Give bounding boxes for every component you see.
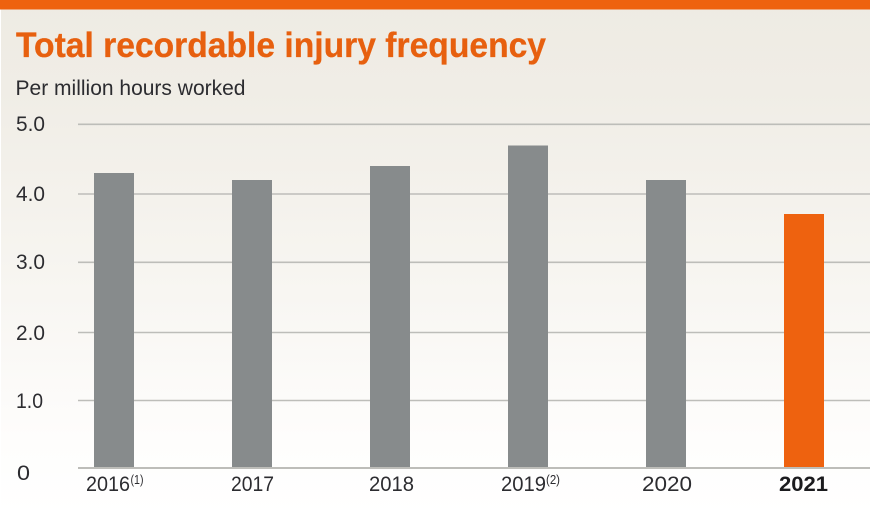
y axis labels: 0	[17, 462, 30, 485]
x axis labels: 2019	[501, 473, 546, 496]
y axis labels: 3.0	[16, 251, 45, 274]
x axis labels: 2021	[779, 473, 828, 496]
bar 2016: 4.3	[94, 173, 134, 468]
bar chart	[94, 146, 824, 468]
x axis labels	[86, 472, 828, 496]
x axis line	[78, 467, 870, 469]
bar 2018: 4.4	[370, 166, 410, 468]
y axis labels: 4.0	[16, 183, 45, 206]
y axis labels: 2.0	[16, 322, 45, 345]
x axis labels: (2)	[546, 472, 560, 487]
title: Total recordable injury frequency	[16, 25, 546, 65]
bar 2020: 4.2	[646, 180, 686, 468]
y axis labels: 5.0	[16, 113, 45, 136]
top orange band	[0, 0, 870, 10]
x axis labels: (1)	[130, 472, 144, 487]
x axis labels: 2020	[642, 473, 692, 496]
gridlines	[78, 124, 870, 401]
subtitle: Per million hours worked	[16, 77, 246, 100]
x axis labels: 2018	[369, 473, 414, 496]
x axis labels: 2016	[86, 473, 130, 496]
bar 2019: 4.7	[508, 146, 548, 468]
y axis labels	[16, 113, 45, 485]
y axis labels: 1.0	[16, 390, 43, 413]
x axis labels: 2017	[231, 473, 274, 496]
bar 2017: 4.2	[232, 180, 272, 468]
bar 2021: 3.7	[784, 214, 824, 468]
